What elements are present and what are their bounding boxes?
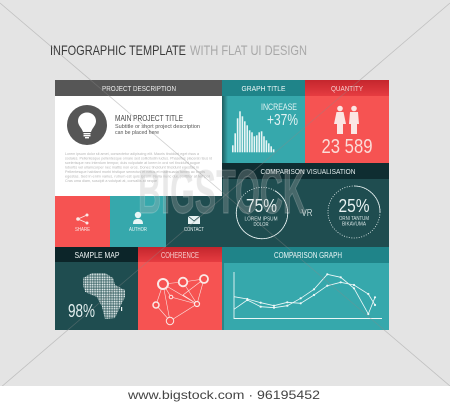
title	[50, 42, 307, 58]
chart: 75 percent circle: DOLOR	[254, 222, 269, 228]
text: quantity number: 23 589	[322, 136, 372, 158]
text: lorem paragraph: scelerisque nec interdum tempor, duis vulputate at lorem in orci vel tincidunt augue	[65, 161, 200, 165]
chart: 75 percent circle: 75%	[246, 196, 277, 216]
text: lorem paragraph	[65, 152, 212, 183]
text: main project title	[115, 114, 200, 136]
chart: 25 percent circle: ORNI TANTUM	[339, 216, 369, 222]
text: increase: INCREASE	[261, 102, 297, 113]
panel: graph title	[222, 80, 305, 163]
chart: 25 percent circle	[328, 186, 380, 238]
panel: coherence	[138, 247, 222, 330]
title: INFOGRAPHIC TEMPLATE	[50, 42, 186, 58]
chart: 75 percent circle	[227, 178, 297, 248]
icon: light bulb	[67, 105, 107, 145]
text: lorem paragraph: egestas. Sed in enim varius, rutrum est quis ipsum. Nulla nunc dui, porttitor at tempor	[65, 174, 211, 178]
icon: envelope	[188, 216, 200, 224]
button: contact	[166, 196, 222, 247]
panel: comparison graph	[222, 247, 389, 330]
heading: project description: PROJECT DESCRIPTION	[102, 84, 176, 93]
text: lorem paragraph: Lorem ipsum dolor sit amet, consectetur adipiscing elit. Mauris tincidunt eget risus a	[65, 152, 200, 156]
heading: comparison graph: COMPARISON GRAPH	[274, 251, 342, 260]
line chart	[234, 272, 382, 318]
heading: comparison visualisation: COMPARISON VISUALISATION	[260, 167, 356, 176]
button: share: SHARE	[75, 227, 91, 233]
text: lorem paragraph: Pellentesque habitant morbi tristique senectus et netus et malesuada fames ac turpis	[65, 170, 205, 174]
button: author	[110, 196, 166, 247]
text: increase	[261, 102, 298, 129]
icon: woman and man	[334, 106, 359, 134]
footer strip	[0, 386, 450, 406]
panel: project description	[55, 80, 222, 196]
button: contact: CONTACT	[184, 227, 204, 233]
text: main project title: Subtitle or short project description	[115, 124, 200, 130]
button: share	[55, 196, 110, 247]
panel: sample map	[55, 247, 138, 330]
text: footer credit: www.bigstock.com · 96195452	[127, 388, 320, 402]
text: versus: VR	[302, 208, 312, 219]
text: main project title: MAIN PROJECT TITLE	[115, 114, 183, 123]
heading: coherence: COHERENCE	[161, 251, 199, 260]
text: lorem paragraph: Cras uma diam, suscipit a volutpat at, convallis at neque	[65, 179, 157, 183]
text: map percentage: 98%	[68, 301, 95, 321]
panel: comparison visualisation	[222, 163, 389, 248]
text: main project title: can be placed here	[115, 130, 159, 136]
panel: quantity	[305, 80, 389, 163]
chart: 75 percent circle: LOREM IPSUM	[244, 216, 278, 222]
chart: 25 percent circle: 25%	[338, 196, 370, 216]
map: dotted africa	[83, 273, 125, 319]
heading: sample map: SAMPLE MAP	[74, 251, 120, 260]
heading: graph title: GRAPH TITLE	[242, 84, 286, 93]
icon: person	[133, 212, 143, 224]
chart: 25 percent circle: BIKAVUMA	[342, 222, 367, 228]
bar chart	[232, 111, 274, 152]
text: increase: +37%	[267, 112, 298, 129]
chart: network diagram	[153, 275, 208, 325]
icon: share	[76, 214, 88, 224]
title: WITH FLAT UI DESIGN	[190, 42, 307, 58]
text: lorem paragraph: lobortis vel ullamcorper nec mattis non eros. Donec tincidunt tincidunt egestas in	[65, 166, 199, 170]
button: author: AUTHOR	[129, 227, 147, 233]
text: lorem paragraph: sodales. Pellentesque pellentesque ornare sed sollicitudin luctus. Phasellus placerat risus id	[65, 156, 212, 160]
heading: quantity: QUANTITY	[331, 84, 363, 93]
